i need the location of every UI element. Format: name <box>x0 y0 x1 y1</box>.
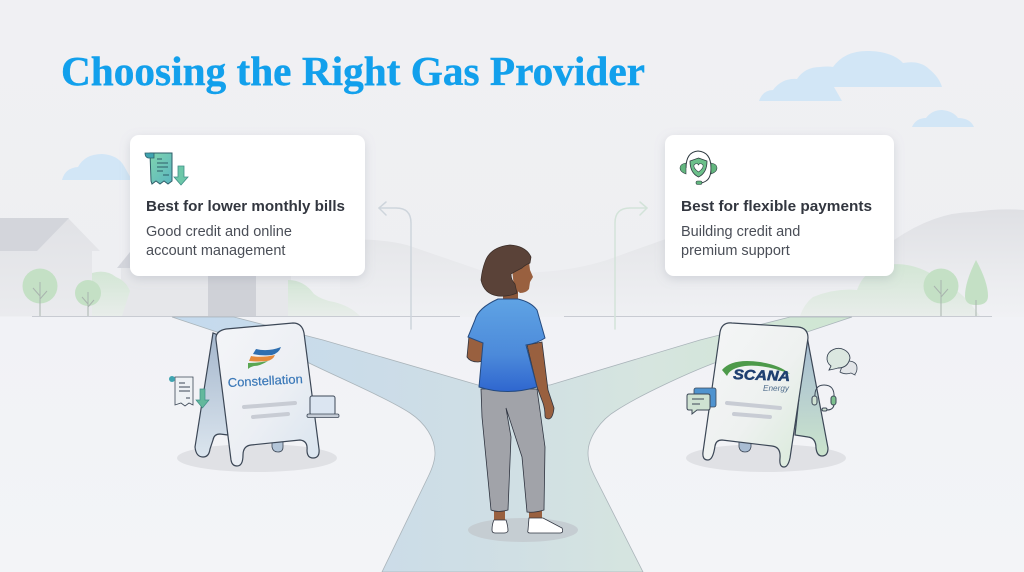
panel: lower monthly bills <box>130 135 365 276</box>
background bushes and trees, right <box>800 260 988 316</box>
icon: chat bubbles left <box>687 388 716 414</box>
sign: SCANA Energy <box>686 323 857 472</box>
neck <box>503 285 518 303</box>
arm, left <box>467 336 484 362</box>
panel: flexible payments <box>665 135 894 276</box>
face <box>512 262 533 293</box>
background sky <box>0 0 1024 318</box>
sign front <box>703 323 808 467</box>
shirt <box>468 299 545 392</box>
icon: laptop <box>307 396 339 418</box>
heading: Best for flexible payments <box>681 199 872 215</box>
heading: Best for lower monthly bills <box>146 199 345 215</box>
shoes <box>492 520 508 533</box>
ground <box>0 317 1024 572</box>
background hills <box>340 209 1024 317</box>
SCANA Energy logo: SCANA <box>733 366 790 384</box>
sign back leg <box>795 331 828 456</box>
icon: receipt <box>169 376 209 408</box>
sign: Constellation <box>169 323 339 472</box>
Constellation logo <box>227 347 303 390</box>
forked road <box>172 317 852 572</box>
description: premium support <box>681 243 790 259</box>
SCANA Energy logo: Energy <box>763 383 790 393</box>
icon: chat bubbles right <box>827 348 857 375</box>
sign centre tab <box>272 440 283 452</box>
sign shadow <box>177 444 337 472</box>
description: Good credit and online <box>146 224 292 240</box>
sign shadow <box>686 444 846 472</box>
person <box>467 245 578 542</box>
icon: bill with down arrow <box>145 153 188 185</box>
person shadow <box>468 518 578 542</box>
icon: headset <box>812 385 836 411</box>
Constellation logo: Constellation <box>227 372 303 390</box>
description: Building credit and <box>681 224 800 240</box>
sign placeholder lines <box>244 403 295 417</box>
description: account management <box>146 243 285 259</box>
icon: support shield <box>680 151 717 184</box>
sign back leg <box>195 333 228 457</box>
sign placeholder lines <box>727 403 780 417</box>
title: Choosing the Right Gas Provider <box>61 48 645 94</box>
arrow: left path <box>379 202 411 329</box>
background clouds <box>62 51 974 180</box>
ankles <box>494 510 542 522</box>
arrow: right path <box>615 202 647 329</box>
background bushes and trees, left <box>22 268 360 316</box>
hair <box>481 245 531 296</box>
sign front <box>216 323 319 466</box>
arm, right <box>527 342 554 419</box>
SCANA Energy logo <box>722 361 790 393</box>
background houses <box>0 218 291 316</box>
pants <box>481 389 545 512</box>
horizon lines <box>32 316 992 318</box>
sign centre tab <box>739 438 751 452</box>
